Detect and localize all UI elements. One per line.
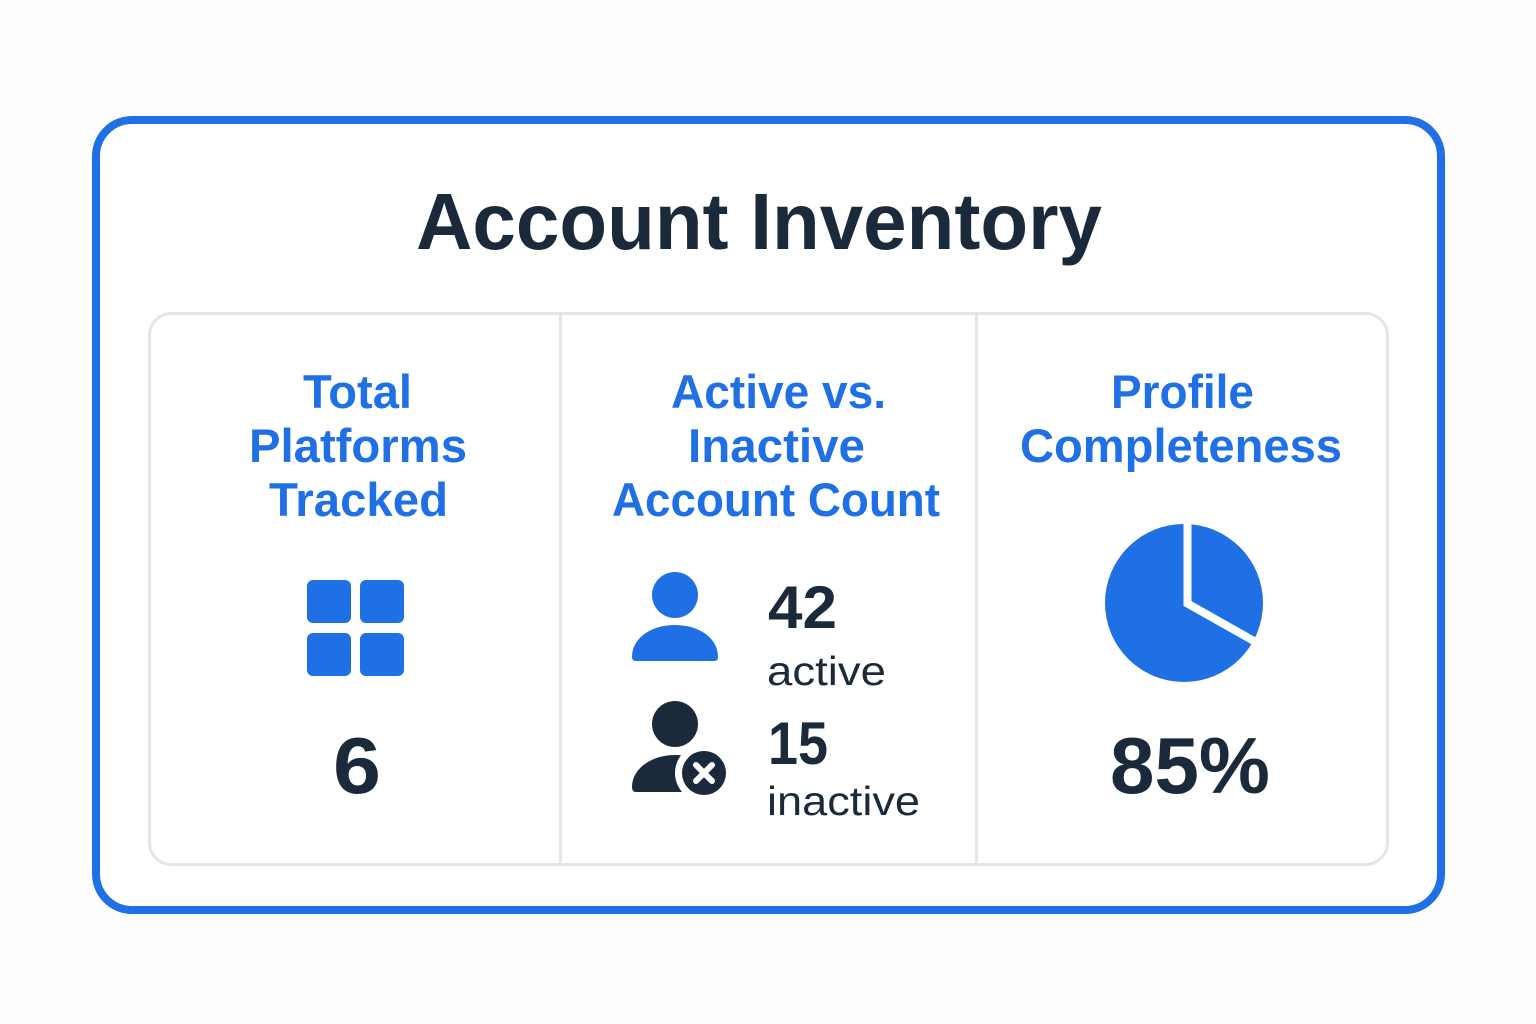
value: 15 inactive bbox=[767, 710, 920, 824]
title: Account Inventory bbox=[416, 177, 1102, 266]
heading: active vs inactive account count: Active vs. bbox=[671, 365, 886, 418]
value: 15 inactive: 15 bbox=[768, 710, 828, 777]
value: 6 platforms: 6 bbox=[333, 721, 381, 810]
heading: profile completeness bbox=[1020, 365, 1342, 472]
value: 15 inactive: inactive bbox=[767, 778, 920, 824]
value: 42 active: active bbox=[767, 648, 886, 694]
heading: total platforms tracked: Total bbox=[303, 365, 412, 418]
icon: inactive user bbox=[632, 701, 733, 802]
panel: active vs inactive bbox=[612, 365, 940, 824]
heading: profile completeness: Profile bbox=[1111, 365, 1254, 418]
panel: stats table bbox=[150, 314, 1388, 864]
heading: total platforms tracked: Platforms bbox=[249, 419, 467, 472]
heading: active vs inactive account count: Account Count bbox=[612, 473, 940, 526]
icon: app grid bbox=[307, 580, 404, 676]
value: 42 active: 42 bbox=[768, 574, 837, 641]
heading: active vs inactive account count: Inactive bbox=[688, 419, 865, 472]
value: 85 percent: 85% bbox=[1110, 721, 1270, 810]
heading: active vs inactive account count bbox=[612, 365, 940, 526]
value: 42 active bbox=[767, 574, 886, 694]
panel: profile completeness bbox=[1020, 365, 1342, 810]
heading: total platforms tracked: Tracked bbox=[269, 473, 448, 526]
heading: profile completeness: Completeness bbox=[1020, 419, 1342, 472]
chart: pie bbox=[1105, 515, 1268, 682]
panel: outer card bbox=[96, 120, 1441, 910]
heading: total platforms tracked bbox=[249, 365, 467, 526]
panel: total platforms bbox=[249, 365, 467, 810]
icon: active user bbox=[632, 572, 718, 661]
